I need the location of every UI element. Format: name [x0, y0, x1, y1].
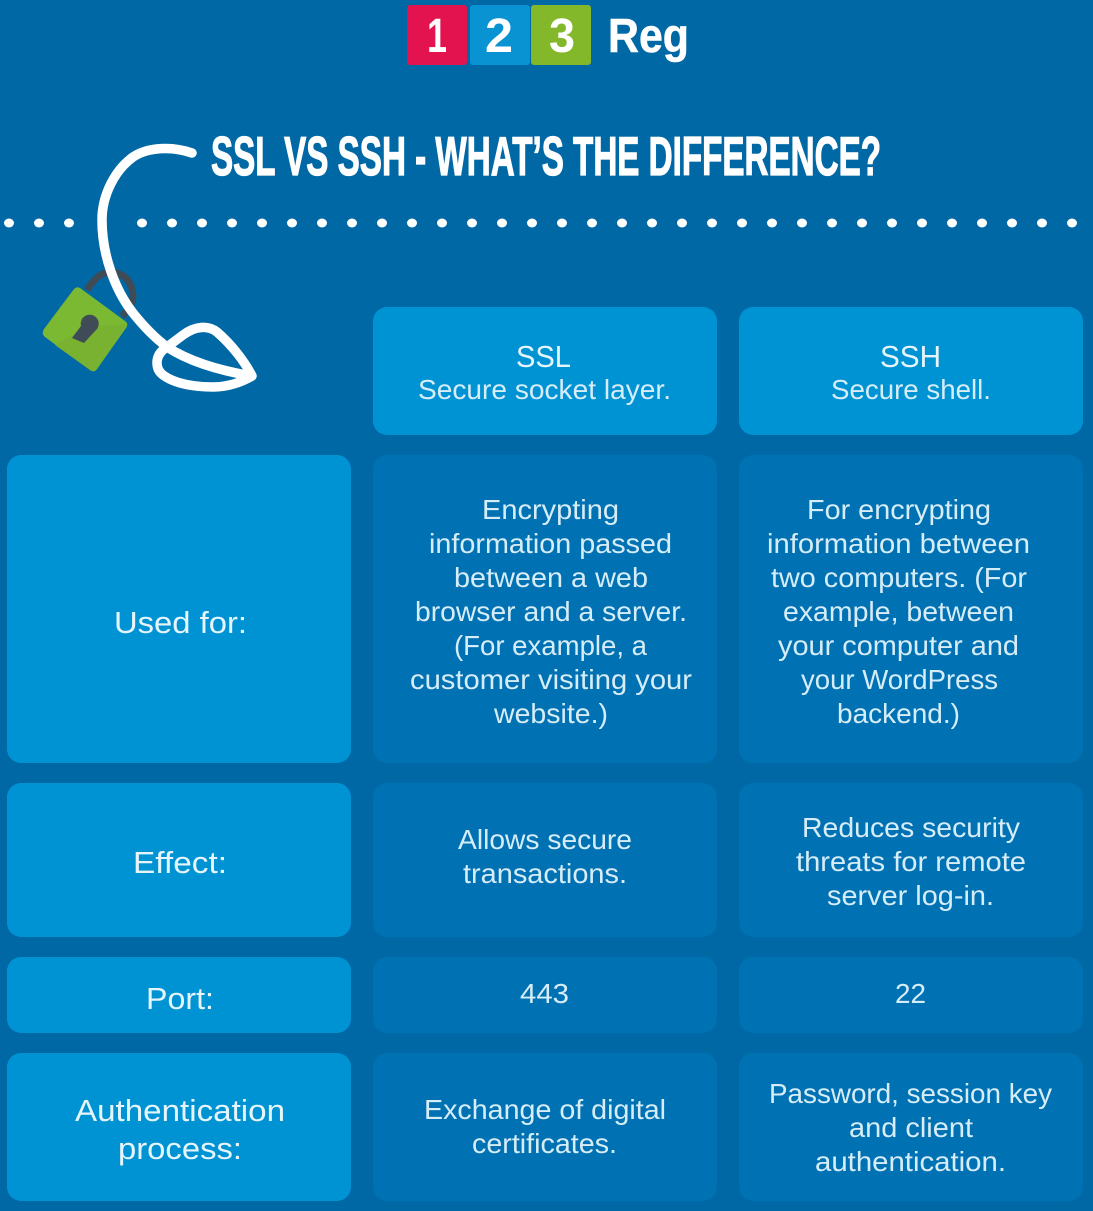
- panel: SSL header: [373, 307, 717, 435]
- panel: SSH header: SSH: [880, 339, 941, 374]
- panel: SSH effect: [739, 783, 1083, 937]
- panel: SSH port: [739, 957, 1083, 1033]
- logo: 123 Reg: [407, 5, 689, 65]
- panel: SSH header: [739, 307, 1083, 435]
- panel: SSL header: SSL: [516, 339, 571, 374]
- panel: SSH port: 22: [895, 978, 926, 1009]
- panel: SSL used for: [373, 455, 717, 763]
- panel: SSH authentication: and client: [849, 1112, 973, 1143]
- panel: SSL used for: website.): [493, 698, 608, 729]
- panel: SSH authentication: Password, session key: [769, 1078, 1052, 1109]
- panel: SSL used for: Encrypting: [482, 494, 619, 525]
- icon: padlock on looped string: [43, 148, 252, 387]
- logo: 123 Reg: 1: [427, 10, 447, 63]
- logo: 123 Reg: 3: [549, 10, 575, 63]
- panel: SSL authentication: [373, 1053, 717, 1201]
- panel: SSL used for: browser and a server.: [415, 596, 687, 627]
- panel: SSH effect: threats for remote: [796, 846, 1026, 877]
- row label: used for: Used for:: [114, 605, 247, 640]
- panel: SSH authentication: authentication.: [815, 1146, 1006, 1177]
- row label: authentication process: [7, 1053, 351, 1201]
- logo: 123 Reg: 2: [485, 10, 513, 63]
- panel: SSL port: 443: [520, 978, 569, 1009]
- panel: SSL authentication: Exchange of digital: [424, 1094, 666, 1125]
- panel: SSL used for: (For example, a: [454, 630, 647, 661]
- panel: SSH used for: [739, 455, 1083, 763]
- row label: authentication process: Authentication: [75, 1093, 285, 1128]
- dotted divider: [4, 218, 1077, 228]
- panel: SSH used for: your WordPress: [801, 664, 998, 695]
- panel: SSL effect: [373, 783, 717, 937]
- row label: effect: [7, 783, 351, 937]
- panel: SSH used for: For encrypting: [807, 494, 991, 525]
- panel: SSH used for: your computer and: [778, 630, 1019, 661]
- panel: SSL port: [373, 957, 717, 1033]
- panel: SSH used for: backend.): [837, 698, 960, 729]
- row label: effect: Effect:: [133, 845, 227, 880]
- panel: SSL authentication: certificates.: [472, 1128, 617, 1159]
- row label: port: Port:: [146, 981, 214, 1016]
- panel: SSL effect: Allows secure: [458, 824, 632, 855]
- row label: used for: [7, 455, 351, 763]
- panel: SSH effect: server log-in.: [827, 880, 994, 911]
- panel: SSL used for: information passed: [429, 528, 672, 559]
- panel: SSL used for: between a web: [454, 562, 648, 593]
- panel: SSH used for: information between: [767, 528, 1030, 559]
- row label: port: [7, 957, 351, 1033]
- panel: SSL effect: transactions.: [463, 858, 627, 889]
- panel: SSH used for: example, between: [783, 596, 1014, 627]
- panel: SSH used for: two computers. (For: [771, 562, 1027, 593]
- logo: 123 Reg: Reg: [608, 10, 689, 63]
- panel: SSH authentication: [739, 1053, 1083, 1201]
- panel: SSL header: Secure socket layer.: [418, 374, 671, 405]
- panel: SSH header: Secure shell.: [831, 374, 991, 405]
- panel: SSL used for: customer visiting your: [410, 664, 692, 695]
- panel: SSH effect: Reduces security: [802, 812, 1020, 843]
- row label: authentication process: process:: [118, 1131, 242, 1166]
